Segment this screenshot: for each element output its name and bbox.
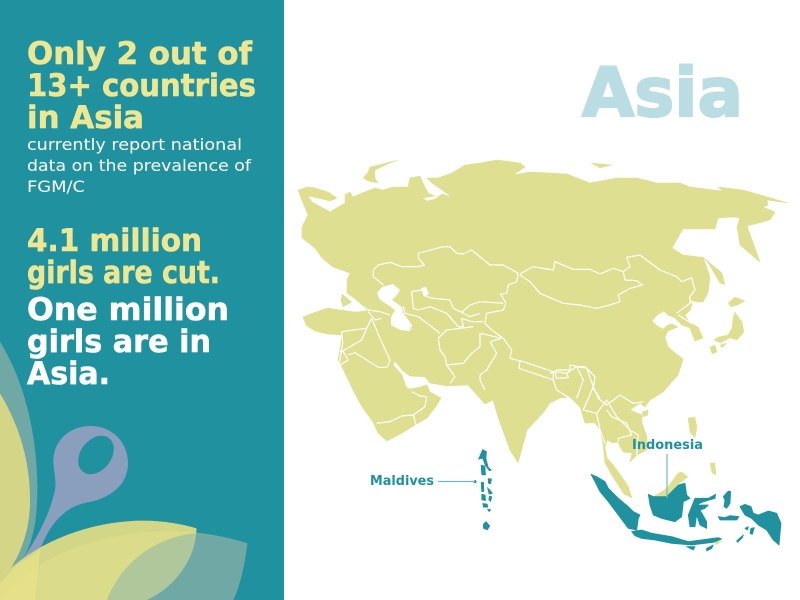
stat: 4.1 million girls are cut: 4.1 million [27, 223, 202, 259]
map: Asia landmass [298, 160, 788, 545]
stat: one million girls in Asia: One million [27, 292, 229, 328]
label: Maldives [370, 473, 475, 489]
map: highlighted Maldives [474, 449, 493, 530]
heading: only 2 out of 13+ countries: in Asia [27, 100, 144, 136]
panel: left teal sidebar [0, 0, 284, 600]
text block: national data: currently report national [27, 135, 242, 154]
stat: one million girls in Asia: Asia. [27, 356, 110, 392]
label: Indonesia [632, 437, 703, 498]
stat: one million girls in Asia: girls are in [27, 324, 211, 360]
label: Indonesia: Indonesia [632, 437, 703, 453]
text block: national data [27, 135, 251, 196]
leader line: Indonesia [666, 454, 668, 498]
title: Asia: Asia [582, 54, 743, 133]
heading: only 2 out of 13+ countries [27, 36, 256, 136]
country borders [373, 247, 695, 398]
map: highlighted Indonesia [591, 474, 781, 551]
stat: 4.1 million girls are cut [27, 223, 220, 291]
seas and lakes [377, 284, 429, 331]
leader line: Maldives [438, 480, 475, 482]
text block: national data: data on the prevalence of [27, 156, 251, 175]
heading: only 2 out of 13+ countries: Only 2 out of [27, 36, 252, 72]
text block: national data: FGM/C [27, 177, 85, 196]
stat: 4.1 million girls are cut: girls are cut. [27, 255, 220, 291]
decorative flower petals [0, 342, 247, 600]
stat: one million girls in Asia [27, 292, 229, 392]
label: Maldives: Maldives [370, 473, 434, 489]
islands [341, 160, 745, 545]
heading: only 2 out of 13+ countries: 13+ countries [27, 68, 256, 104]
